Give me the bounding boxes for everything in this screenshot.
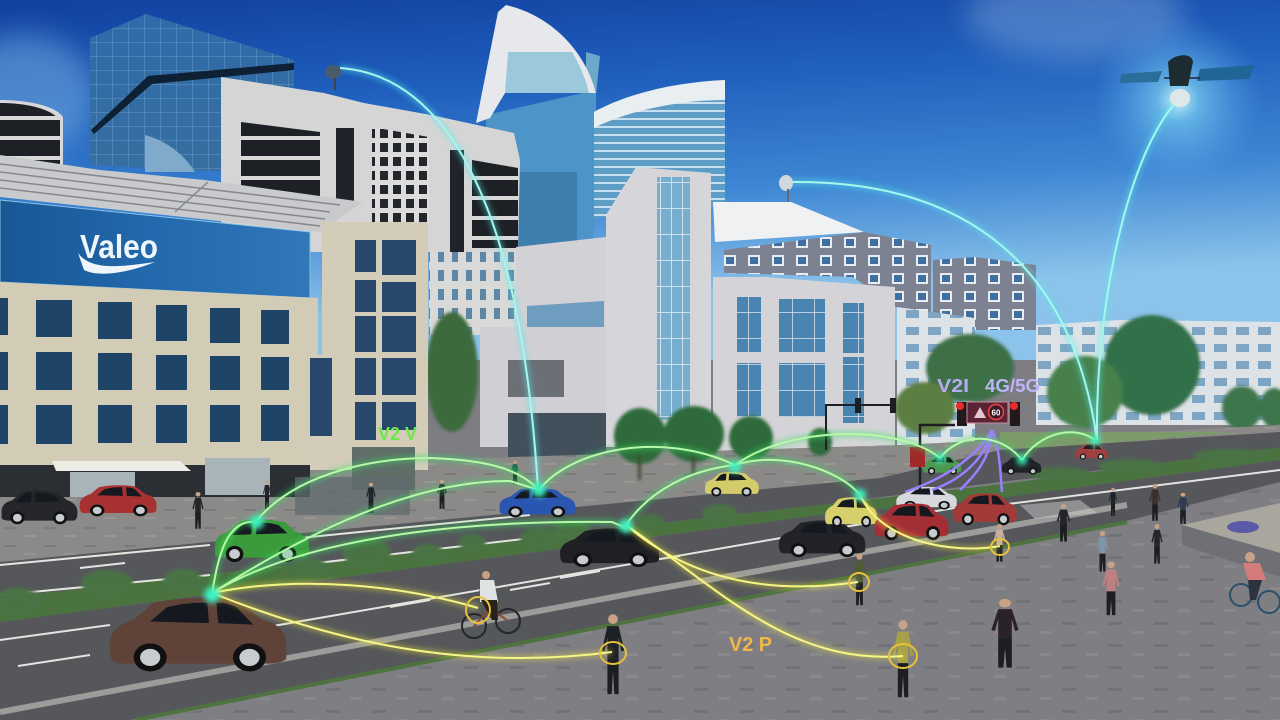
person top sidewalk xyxy=(1109,488,1117,516)
lower road xyxy=(0,460,1280,720)
plaza xyxy=(150,484,1280,720)
street trees xyxy=(614,406,832,480)
person crossing xyxy=(853,553,866,605)
V2V arcs core xyxy=(212,432,1095,593)
small beige block xyxy=(429,252,516,335)
person on sidewalk xyxy=(437,480,447,509)
parked red car xyxy=(80,485,156,516)
sky background xyxy=(0,0,1280,360)
lower block xyxy=(480,327,615,447)
parked black car xyxy=(2,490,77,524)
person at shelter left xyxy=(263,481,271,509)
right cyclist xyxy=(1230,552,1280,613)
person near shop xyxy=(192,492,204,529)
long range arcs: cell network glow xyxy=(340,68,1178,490)
V2I purple fan xyxy=(905,430,1002,492)
glass strip xyxy=(657,177,690,420)
right apartment block xyxy=(933,257,1036,330)
dark sedan right xyxy=(779,520,865,557)
label: V2I: V2I xyxy=(937,376,969,396)
blue car xyxy=(500,488,575,517)
raised planter xyxy=(1182,503,1280,577)
person by blue car xyxy=(511,461,519,484)
V2P arcs core xyxy=(212,495,1000,658)
central white building xyxy=(480,167,895,462)
apartment block xyxy=(724,232,931,313)
hedges xyxy=(0,449,1266,614)
dark sedan center xyxy=(560,529,659,567)
vehicle node glows xyxy=(204,436,1100,603)
crosswalk xyxy=(1020,500,1097,519)
person yellow shirt xyxy=(893,620,913,697)
icon: rooftop antenna left xyxy=(325,65,341,90)
arched glass tower xyxy=(476,5,600,250)
red car xyxy=(875,503,948,540)
red car right xyxy=(953,493,1017,525)
bike lane divider xyxy=(0,505,1127,712)
roof xyxy=(0,155,363,232)
blue facade band xyxy=(0,200,310,298)
white mid building xyxy=(897,307,975,445)
roof slats xyxy=(0,164,340,226)
bus shelter xyxy=(295,477,410,515)
icon: rooftop antenna right xyxy=(779,175,793,202)
communication signal arcs xyxy=(212,68,1178,668)
traffic light and V2I sign xyxy=(910,402,1020,490)
person plaza xyxy=(1096,531,1108,572)
Valeo logo: Valeo xyxy=(80,228,158,265)
beige side building xyxy=(310,222,428,490)
right block windows xyxy=(737,297,864,423)
beige facade xyxy=(0,282,318,470)
label: 4G/5G: 4G/5G xyxy=(985,376,1040,396)
V2V arcs glow xyxy=(212,432,1095,593)
right window column xyxy=(450,150,464,252)
white office building xyxy=(221,77,520,252)
right balconies xyxy=(472,160,518,248)
median xyxy=(0,447,1280,622)
far left dark tower xyxy=(0,100,63,165)
curved glass building xyxy=(594,80,725,218)
label: V2P: V2 P xyxy=(729,634,772,656)
far sidewalk xyxy=(0,425,1280,565)
distant black car xyxy=(1002,457,1041,475)
label: V2V: V2 V xyxy=(378,424,417,444)
cyclist xyxy=(462,571,520,638)
entrance xyxy=(508,413,606,462)
glass tower xyxy=(90,14,294,175)
right block xyxy=(713,277,895,455)
curved window xyxy=(527,301,604,330)
far trees xyxy=(426,312,1280,434)
distant red car xyxy=(1076,444,1107,460)
person white shirt xyxy=(1057,504,1070,542)
yellow car far xyxy=(705,472,759,496)
tower xyxy=(606,167,711,445)
windows xyxy=(0,298,289,444)
icon: satellite xyxy=(1120,55,1254,107)
person black jacket foreground xyxy=(602,614,624,694)
green car xyxy=(215,520,309,562)
rounded upper block xyxy=(516,237,606,330)
V2P arcs glow xyxy=(212,495,1000,658)
person dark shirt foreground xyxy=(991,599,1019,668)
storefront xyxy=(0,465,310,497)
person pink xyxy=(994,524,1006,562)
awning xyxy=(52,461,191,471)
person at shelter xyxy=(366,483,376,513)
white car xyxy=(896,487,957,510)
pedestrian signal rings xyxy=(466,539,1009,668)
long range arcs: core lines xyxy=(340,68,1178,490)
speed limit: 60 xyxy=(992,408,1001,418)
yellow car xyxy=(825,497,877,527)
stacked balconies xyxy=(241,122,320,197)
street lamp gantry xyxy=(826,398,896,450)
person by planter xyxy=(1151,524,1163,564)
background buildings xyxy=(0,5,1280,445)
green strip xyxy=(135,522,1127,720)
ground: sidewalk, roads, median and plaza xyxy=(0,425,1280,720)
dark window column xyxy=(336,128,354,202)
distant green car xyxy=(923,456,961,475)
Valeo headquarters xyxy=(0,155,363,497)
person far plaza xyxy=(1177,493,1189,524)
pedestrians xyxy=(192,461,1189,697)
lane markings xyxy=(0,470,1280,666)
shop windows xyxy=(70,458,270,497)
far right white building xyxy=(1036,320,1280,425)
person group xyxy=(1149,484,1161,521)
upper road xyxy=(0,432,1280,598)
white roof block xyxy=(713,202,864,242)
grid window block xyxy=(372,127,429,225)
person pink plaza xyxy=(1102,561,1120,615)
dark opening xyxy=(508,360,564,397)
brown car xyxy=(110,598,286,671)
far lawn xyxy=(1000,432,1240,448)
cars xyxy=(2,444,1107,671)
